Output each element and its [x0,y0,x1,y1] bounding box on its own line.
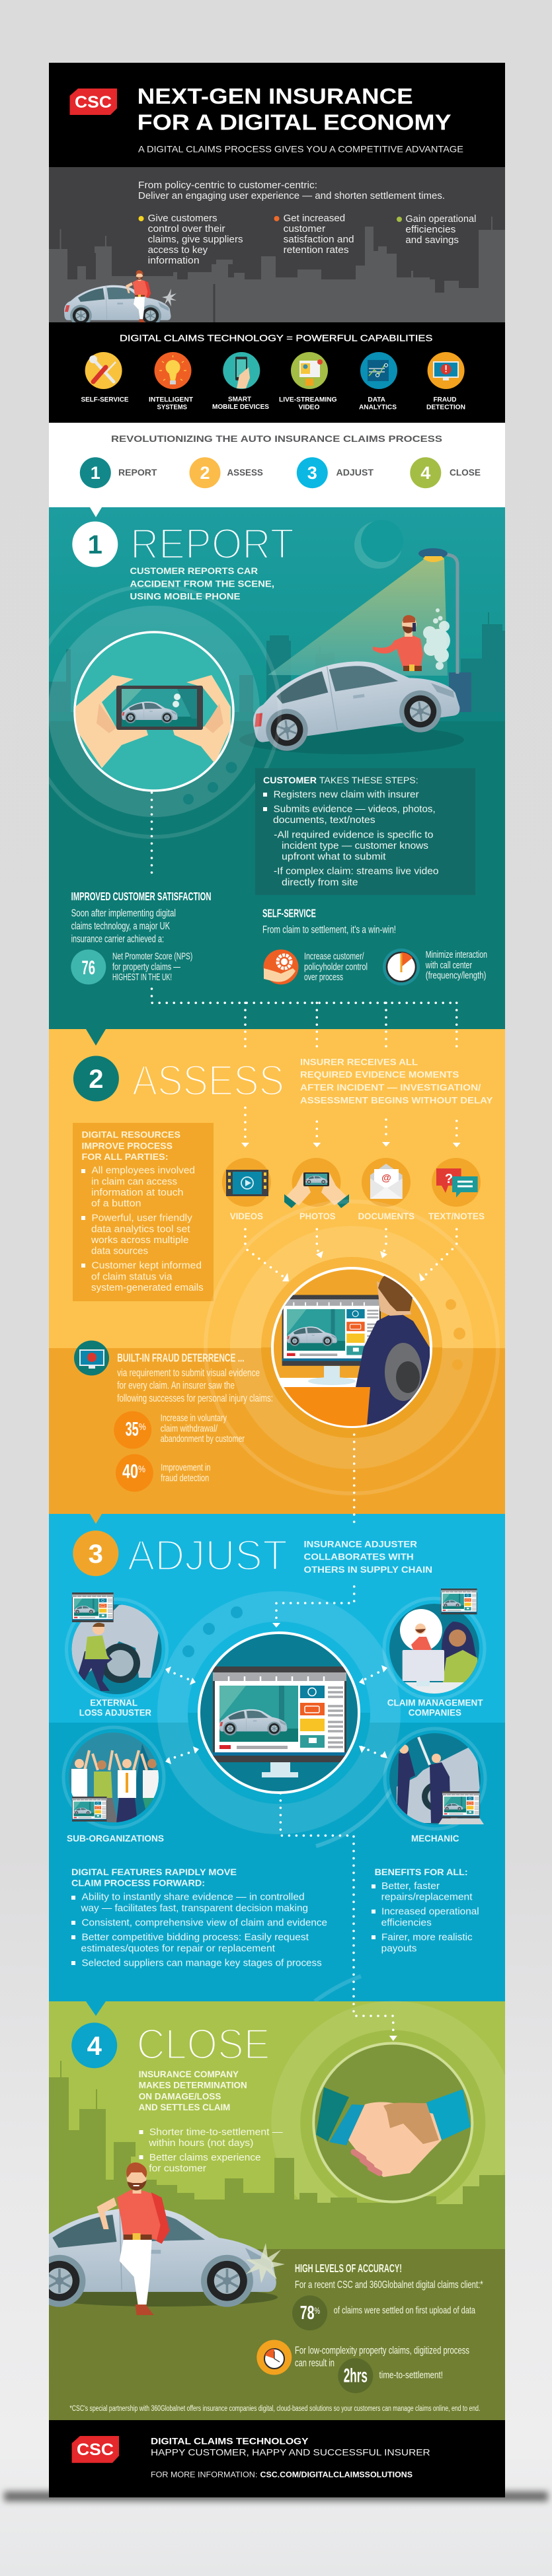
improved customer satisfaction: Soon after implementing digital [71,908,176,919]
minimize text: with call center [425,960,472,971]
section description: ON DAMAGE/LOSS [139,2091,221,2101]
steps box: -If complex claim: streams live video [274,867,439,877]
resources box: All employees involved [91,1166,195,1176]
icon: clock [383,948,420,985]
step 2: 2 [200,463,210,483]
logo: CSC footer: CSC [77,2441,114,2459]
logo: CSC: CSC [75,93,112,112]
resources box: Customer kept informed [91,1261,202,1271]
icon: text/notes [432,1158,481,1207]
collaboration arrows [165,1665,387,1764]
steps box: upfront what to submit [282,852,386,863]
resources box: FOR ALL PARTIES: [82,1151,168,1162]
footer link [151,2470,413,2480]
section title: REPORT [130,519,294,568]
benefit: customers: access to key [148,245,208,256]
step number: 2 [89,1065,104,1094]
fraud text [117,1351,273,1404]
ground shadow [239,725,464,754]
self-service text: From claim to settlement, it's a win-win! [262,925,396,936]
benefits text: Fairer, more realistic [381,1933,473,1943]
stat: 40 percent [116,1454,210,1491]
stat: 78 percent: of claims were settled on first upload of data [334,2306,476,2316]
benefits text: BENEFITS FOR ALL: [375,1867,468,1877]
hands and phone [75,675,231,768]
participant: claim management companies [384,1589,485,1718]
section description: ACCIDENT FROM THE SCENE, [130,578,274,589]
panel: capabilities [49,322,505,423]
capability labels: INTELLIGENT [149,396,194,404]
stat: NPS 76: 76 [82,957,95,979]
skyline [49,2061,505,2249]
adjuster seen from behind [356,1311,431,1433]
close bullets: within hours (not days) [148,2138,253,2149]
notch [86,2001,106,2016]
evidence labels: TEXT/NOTES [428,1211,485,1221]
steps box: CUSTOMER [263,775,317,785]
step 1 [80,457,157,488]
resources box: works across multiple [91,1235,188,1246]
process heading: REVOLUTIONIZING THE AUTO INSURANCE CLAIMS PROCESS [111,433,442,444]
logo: CSC footer [72,2436,119,2463]
section description: CUSTOMER REPORTS CAR [130,565,258,576]
icon: photos [284,1158,349,1208]
tablet [441,1589,477,1614]
dark band [49,2249,505,2420]
resources box [73,1123,214,1301]
section description: INSURANCE COMPANY [139,2069,239,2079]
panel: close [19,2001,514,2420]
handshake circle [313,2044,472,2202]
title: FOR A DIGITAL ECONOMY [138,111,452,135]
label: SUB-ORGANIZATIONS [67,1833,164,1843]
footer [49,2420,505,2497]
stat: 78 percent: % [315,2305,320,2316]
benefits text: Increased operational [381,1907,479,1917]
icon: fraud detection [428,352,465,389]
label: EXTERNAL [90,1698,138,1708]
section description: INSURANCE ADJUSTER [304,1538,417,1549]
footer link: CSC.COM/DIGITALCLAIMSSOLUTIONS [260,2470,413,2480]
section title: CLOSE [137,2020,270,2068]
step 4: CLOSE [450,467,481,478]
stat: 35 percent: % [139,1421,146,1433]
stat: 40 percent: 40 [122,1460,138,1482]
benefits text: Better, faster [381,1881,440,1892]
icon: self-service [85,352,122,389]
icon: videos [222,1158,271,1207]
tablet [72,1592,114,1622]
resources box: system-generated emails [91,1283,204,1293]
accident person [373,615,423,671]
icon: documents [362,1158,411,1207]
stat: 78 percent: 78 [300,2303,315,2324]
minimize text: Minimize interaction [426,950,487,960]
step number: 3 [89,1540,103,1569]
benefits text: efficiencies [381,1917,432,1928]
icon: smart mobile devices [223,352,260,389]
footer link: FOR MORE INFORMATION: [151,2470,257,2480]
step 2: ASSESS [227,467,263,478]
minimize text [425,950,487,982]
panel: report [28,507,505,1047]
steps box: -All required evidence is specific to [274,830,434,840]
icon: live-streaming video [291,352,328,389]
street lamp [268,548,471,712]
benefit: savings: and savings [405,235,459,246]
section description: COLLABORATES WITH [304,1552,414,1562]
panel: adjust [49,1435,505,2033]
benefit: satisfaction: satisfaction and [284,234,354,245]
control text: Increase customer/ [304,951,364,962]
icon: settlement clock [256,2340,292,2375]
step 3: 3 [307,463,317,483]
benefit: savings: efficiencies [405,225,455,235]
monitor scene [272,1268,431,1433]
rings around monitor [206,1201,498,1493]
capability labels [81,395,465,411]
digital features text: Consistent, comprehensive view of claim and evidence [82,1918,327,1929]
close bullets [139,2127,283,2174]
self-service text: SELF-SERVICE [262,906,316,919]
settlement text: For low-complexity property claims, digitized process [295,2345,469,2356]
steps box: Submits evidence — videos, photos, [274,804,436,814]
participant: sub-organizations [63,1727,164,1843]
evidence labels: VIDEOS [230,1211,263,1221]
panel: assess [49,1029,505,1514]
steps box: directly from site [282,877,358,888]
step number [73,1530,118,1576]
top arrow [272,1587,354,1628]
panel drop shadow [4,2491,548,2501]
close bullets: Shorter time-to-settlement — [149,2127,283,2137]
steps box [255,768,475,895]
fraud text: via requirement to submit visual evidence [117,1367,260,1378]
icon: documents: @ [381,1172,391,1184]
person and car [19,2163,285,2315]
capability labels: SYSTEMS [157,403,187,411]
label: LOSS ADJUSTER [79,1707,151,1718]
section description [300,1056,493,1105]
participant: external loss adjuster [66,1592,167,1718]
resources box: of a button [91,1199,141,1209]
resources box: DIGITAL RESOURCES [82,1129,180,1140]
benefit: satisfaction: retention rates [284,245,349,256]
capability labels: VIDEO [299,403,320,411]
label: MECHANIC [411,1833,459,1843]
step number [72,522,118,567]
step 3 [297,457,374,488]
intro text [138,180,445,201]
benefit: customers [139,213,243,266]
stat: 35 percent [114,1411,245,1449]
capability labels: DETECTION [426,403,465,411]
fraud text: for every claim. An insurer saw the [117,1380,235,1392]
digital features text [71,1867,327,1968]
close bullets: for customer [149,2164,206,2174]
city skyline [49,612,505,712]
section description: MAKES DETERMINATION [139,2080,247,2091]
settlement text: can result in [295,2357,335,2369]
settlement text [295,2345,469,2369]
engine steam [423,608,450,670]
dotted connector from assess [353,1435,356,1528]
stat: NPS 76: HIGHEST IN THE UK! [112,972,172,983]
section description [304,1538,432,1575]
step 3: ADJUST [336,467,374,478]
section description: AND SETTLES CLAIM [139,2102,230,2112]
tablet [72,1797,107,1822]
benefits text [372,1867,479,1954]
section description: REQUIRED EVIDENCE MOMENTS [300,1069,459,1080]
participant: mechanic [385,1729,485,1843]
header band [49,63,505,167]
resources box: in claim can access [91,1176,177,1187]
capability labels: MOBILE DEVICES [212,403,269,411]
steps box: incident type — customer knows [282,841,428,851]
stat: 40 percent: fraud detection [161,1473,209,1484]
dotted connectors to assess [151,987,457,1026]
capability labels: LIVE-STREAMING [279,396,337,404]
rings around monitor [157,1591,401,2001]
resources box: data analytics tool set [91,1224,190,1234]
skyline [49,217,505,322]
benefits text: repairs/replacement [381,1892,473,1903]
arrows to monitor [245,1229,457,1281]
icon: data analytics [360,352,397,389]
notch [90,507,102,517]
benefit: satisfaction: customer [284,224,325,234]
subtitle: A DIGITAL CLAIMS PROCESS GIVES YOU A COMPETITIVE ADVANTAGE [138,144,463,155]
fraud text: following successes for personal injury claims: [117,1393,273,1404]
resources box: information at touch [91,1188,184,1198]
control text [304,951,368,983]
panel: intro with skyline [49,167,505,326]
improved customer satisfaction: insurance carrier achieved a: [71,933,164,945]
label [79,1698,151,1718]
digital features text: DIGITAL FEATURES RAPIDLY MOVE [71,1867,237,1877]
resources box: of claim status via [91,1271,173,1282]
section description: OTHERS IN SUPPLY CHAIN [304,1564,432,1575]
label: COMPANIES [409,1707,461,1718]
step 4: 4 [420,463,430,483]
benefit: savings: Gain operational [405,214,476,225]
steps box: Registers new claim with insurer [274,790,419,801]
step number: 1 [88,530,102,559]
steps box: TAKES THESE STEPS: [319,775,418,785]
digital features text: estimates/quotes for repair or replacement [81,1943,275,1954]
fraud icon [74,1341,109,1375]
resources box: data sources [91,1246,148,1257]
step number [71,2022,117,2068]
step 4 [410,457,481,488]
digital features text: way — facilitates fast, transparent decision making [80,1903,308,1914]
benefit: satisfaction [274,213,354,256]
logo: CSC [70,89,117,115]
digital features text: Selected suppliers can manage key stages of process [82,1958,322,1968]
notch [86,1029,106,1046]
capabilities heading: DIGITAL CLAIMS TECHNOLOGY = POWERFUL CAPABILITIES [120,333,432,343]
benefit: savings [397,214,476,246]
stat: 40 percent: Improvement in [161,1463,210,1474]
stat: 78 percent [292,2295,476,2330]
capability labels: FRAUD [434,396,457,404]
minimize text: (frequency/length) [426,971,486,982]
stat: 35 percent: abandonment by customer [161,1434,245,1445]
dotted connector [151,793,153,880]
stat: NPS 76 [71,950,192,984]
control text: policyholder control [304,962,368,972]
capability labels: DATA [368,396,385,404]
improved customer satisfaction: IMPROVED CUSTOMER SATISFACTION [71,890,211,903]
central monitor [199,1633,359,1793]
rings around handshake [271,2001,514,2244]
icon: intelligent systems [155,352,192,389]
label [387,1698,483,1718]
improved customer satisfaction [71,890,211,945]
step number [73,1055,119,1102]
footer tagline: HAPPY CUSTOMER, HAPPY AND SUCCESSFUL INSURER [151,2447,430,2457]
benefit: customers: information [148,256,200,266]
section description [130,568,274,600]
crashed car [253,661,460,751]
stat: 2 hours: time-to-settlement! [379,2371,443,2381]
section title: ASSESS [132,1056,284,1104]
benefit: customers: Give customers [148,213,217,224]
stat: 35 percent: 35 [126,1418,139,1440]
section description: USING MOBILE PHONE [130,591,241,602]
fraud text: BUILT-IN FRAUD DETERRENCE ... [117,1351,245,1365]
dotted connector over close [354,2004,393,2033]
moon [354,520,403,569]
resources box: IMPROVE PROCESS [82,1140,173,1151]
hand circle group [28,586,280,837]
steps box: documents, text/notes [273,815,375,826]
dotted connector to close [280,1793,393,2033]
accuracy heading: HIGH LEVELS OF ACCURACY! [295,2262,402,2275]
footer tagline [151,2436,430,2457]
evidence labels: DOCUMENTS [358,1211,414,1221]
title [138,85,452,135]
icon: hand and gear [263,950,299,984]
digital features text: Better competitive bidding process: Easily request [82,1933,309,1943]
close bullets: Better claims experience [149,2153,261,2163]
intro text: Deliver an engaging user experience — and shorten settlement times. [138,191,445,201]
digital features text: Ability to instantly share evidence — in controlled [82,1892,305,1903]
stat: NPS 76: Net Promoter Score (NPS) [112,951,192,962]
intro text: From policy-centric to customer-centric: [138,180,317,191]
capability labels: SMART [228,395,252,403]
arrowhead [389,2036,397,2041]
section description [139,2069,247,2112]
section description: ASSESSMENT BEGINS WITHOUT DELAY [300,1094,493,1105]
stat: 2 hours: 2hrs [344,2365,368,2387]
step 1: 1 [91,463,100,483]
improved customer satisfaction: claims technology, a major UK [71,921,170,932]
connector dots over section [245,1032,457,1047]
evidence labels: PHOTOS [299,1211,336,1221]
section description: AFTER INCIDENT — INVESTIGATION/ [300,1082,481,1092]
section title: ADJUST [128,1531,288,1579]
evidence labels [230,1213,484,1219]
stat: NPS 76: for property claims — [112,962,180,972]
capability labels: SELF-SERVICE [81,396,128,404]
resources box: Powerful, user friendly [91,1213,193,1224]
notch [90,1514,102,1524]
title: NEXT-GEN INSURANCE [138,85,413,109]
label: CLAIM MANAGEMENT [387,1698,483,1708]
step number: 4 [87,2032,102,2061]
step 1: REPORT [118,467,157,478]
control text: over process [304,972,343,983]
step 2 [189,457,263,488]
section description: INSURER RECEIVES ALL [300,1056,418,1067]
benefits text: payouts [381,1943,416,1954]
stat: 40 percent: % [138,1464,145,1475]
benefit: customers: control over their [148,224,225,234]
stat: 35 percent: Increase in voluntary [161,1413,227,1424]
icon: text/notes: ? [445,1172,453,1186]
footer tagline: DIGITAL CLAIMS TECHNOLOGY [151,2436,309,2447]
self-service text [262,909,395,934]
digital features text: CLAIM PROCESS FORWARD: [71,1878,205,1888]
capability labels: ANALYTICS [359,403,397,411]
panel: process overview [49,423,505,507]
benefit: satisfaction: Get increased [284,213,345,224]
laptop [438,1791,484,1824]
benefit: customers: claims, give suppliers [148,234,243,245]
stat: 35 percent: claim withdrawal/ [161,1423,218,1434]
car with person [64,270,177,326]
stat: 2 hours [338,2358,443,2393]
arrows to evidence types [241,1108,461,1147]
